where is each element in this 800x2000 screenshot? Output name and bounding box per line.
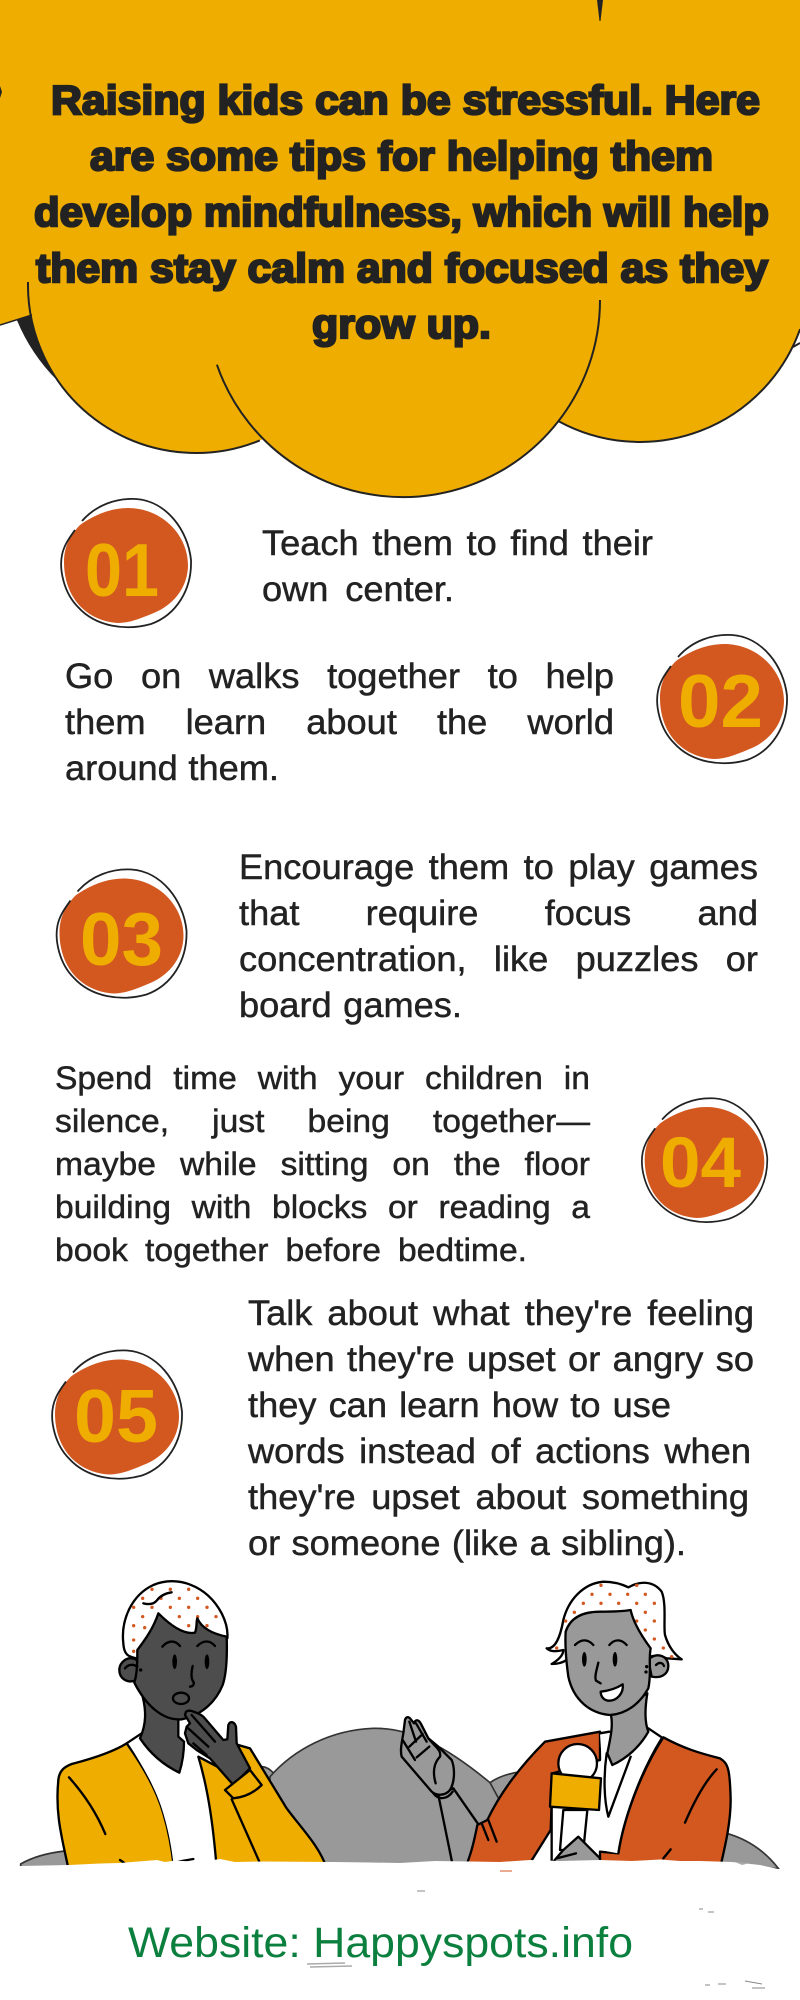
- tip 2 text: them learn about the world: [65, 703, 614, 742]
- hair: [123, 1581, 227, 1660]
- brush specks: [307, 1891, 765, 1988]
- tip 2 text: [65, 657, 614, 788]
- hand on mic: [553, 1837, 600, 1868]
- tip 1 text: Teach them to find their: [262, 524, 653, 563]
- tip 4 text: maybe while sitting on the floor: [55, 1146, 590, 1182]
- tip 3 text: [239, 848, 758, 1025]
- tip 4 text: silence, just being together—: [55, 1103, 590, 1139]
- neck: [607, 1693, 648, 1765]
- illustration: reporter with microphone: [401, 1582, 731, 1868]
- tip 5 text: words instead of actions when: [248, 1432, 751, 1471]
- hair dots: [555, 1584, 673, 1658]
- tip 3 text: board games.: [239, 986, 462, 1025]
- tip 5 text: [248, 1294, 754, 1563]
- heading: are some tips for helping them: [90, 133, 713, 179]
- badge 01: 01: [85, 528, 159, 612]
- jacket left: [465, 1732, 600, 1868]
- jacket left: [57, 1743, 174, 1868]
- tip 5 text: or someone (like a sibling).: [248, 1524, 686, 1563]
- header cloud: [0, 0, 800, 497]
- hair dots: [132, 1588, 218, 1653]
- jacket right: [198, 1745, 327, 1868]
- jacket right: [600, 1737, 731, 1868]
- microphone: [560, 1810, 587, 1850]
- heading: them stay calm and focused as they: [36, 245, 768, 291]
- website footer: Website: Happyspots.info: [128, 1919, 633, 1967]
- tip 5 text: they're upset about something: [248, 1478, 749, 1517]
- heading: develop mindfulness, which will help: [34, 189, 769, 235]
- shirt: [128, 1734, 217, 1868]
- tip 3 text: concentration, like puzzles or: [239, 940, 758, 979]
- hair: [547, 1582, 682, 1664]
- face: [134, 1613, 227, 1719]
- tip 4 text: building with blocks or reading a: [55, 1189, 590, 1225]
- tip 1 text: own center.: [262, 570, 454, 609]
- badge 03: [57, 869, 187, 998]
- badge 04: [642, 1098, 767, 1222]
- badge 05: 05: [74, 1374, 158, 1458]
- illustration: thinking person: [57, 1581, 327, 1868]
- ear: [119, 1658, 142, 1681]
- face: [565, 1610, 651, 1715]
- neck: [140, 1697, 184, 1773]
- cuff: [225, 1770, 262, 1798]
- hand: [185, 1711, 250, 1785]
- tip 5 text: when they're upset or angry so: [248, 1340, 754, 1379]
- badge 04: 04: [660, 1124, 742, 1203]
- tip 2 text: around them.: [65, 749, 279, 788]
- arm: [438, 1788, 480, 1868]
- badge 02: 02: [678, 659, 763, 743]
- brushed white ground: [0, 1859, 800, 2000]
- heading: [34, 77, 769, 347]
- collar gap: [180, 1722, 192, 1738]
- ear: [648, 1655, 668, 1677]
- tip 4 text: Spend time with your children in: [55, 1060, 590, 1096]
- tip 2 text: Go on walks together to help: [65, 657, 614, 696]
- tip 4 text: [55, 1060, 590, 1268]
- heading: Raising kids can be stressful. Here: [51, 77, 760, 123]
- badge 02: [657, 635, 787, 763]
- tip 3 text: that require focus and: [239, 894, 758, 933]
- background hills: [21, 1728, 778, 1870]
- badge 05: [52, 1350, 182, 1479]
- tip 4 text: book together before bedtime.: [55, 1232, 527, 1268]
- tip 3 text: Encourage them to play games: [239, 848, 758, 887]
- badge 03: 03: [80, 897, 163, 981]
- badge 01: [61, 499, 191, 627]
- inner collar: [605, 1753, 631, 1817]
- mouth: [601, 1684, 623, 1701]
- heading: grow up.: [312, 301, 491, 347]
- shirt: [583, 1732, 662, 1853]
- tip 5 text: Talk about what they're feeling: [248, 1294, 754, 1333]
- tip 5 text: they can learn how to use: [248, 1386, 671, 1425]
- tip 1 text: [262, 524, 653, 609]
- raised hand: [401, 1717, 454, 1795]
